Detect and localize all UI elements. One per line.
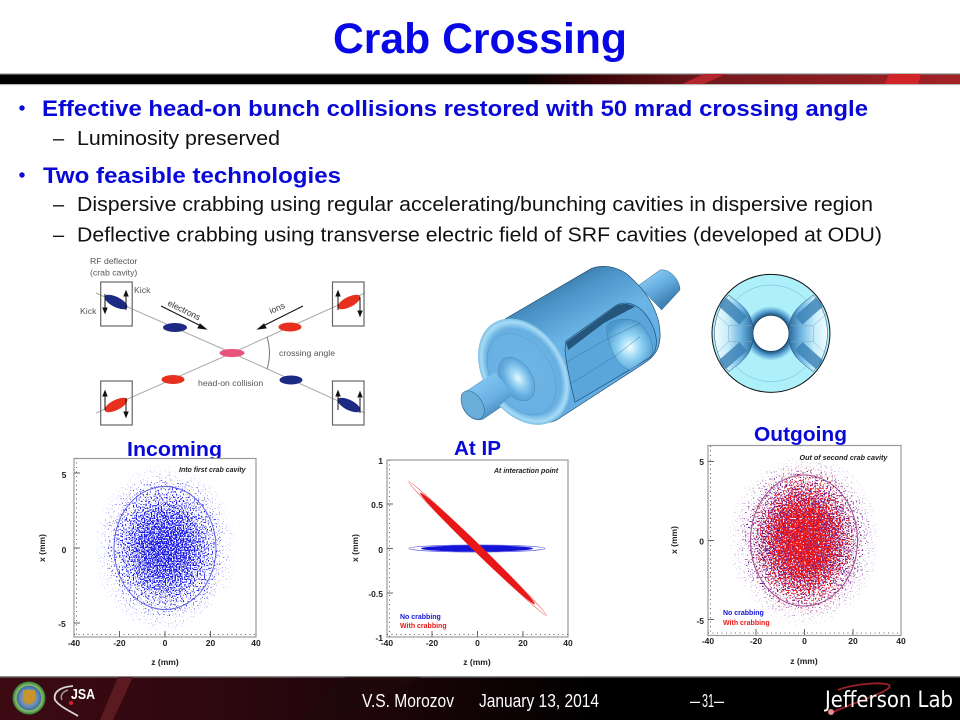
- crab cavity boxes: [101, 282, 364, 425]
- legend: No crabbing: [400, 614, 441, 621]
- legend: [400, 614, 447, 630]
- legend: With crabbing: [400, 623, 447, 630]
- plot caption: At interaction point: [493, 468, 559, 475]
- tick labels: 0: [699, 536, 704, 546]
- sub-bullet: luminosity: Luminosity preserved: [77, 128, 280, 150]
- beam ellipse: [114, 486, 216, 610]
- footer text: page number: 31: [702, 691, 714, 711]
- plot heading: Outgoing: Outgoing: [754, 423, 847, 446]
- bullet list: [19, 96, 882, 246]
- inner lobe: [607, 319, 653, 370]
- tick labels: -1: [375, 633, 383, 643]
- tick labels: 40: [251, 638, 261, 648]
- schematic labels: crossing angle: [279, 348, 335, 358]
- axis ticks: [387, 460, 568, 637]
- tick labels: 0: [378, 545, 383, 555]
- tick labels: 1: [378, 456, 383, 466]
- tick labels: 20: [848, 636, 858, 646]
- lobe mesh lines: [716, 314, 826, 354]
- crab crossing schematic: [80, 256, 365, 425]
- hub: [491, 351, 542, 407]
- inner edges: [567, 323, 640, 402]
- tick labels: 5: [699, 457, 704, 467]
- tick labels: [37, 470, 261, 667]
- right beam pipe: [638, 270, 680, 310]
- tick labels: [350, 456, 573, 667]
- front face: [459, 301, 589, 442]
- schematic labels: Kick: [134, 285, 151, 295]
- tick labels: z (mm): [790, 656, 818, 666]
- icon: DOE seal: [12, 682, 46, 714]
- no crabbing beam: [409, 545, 545, 552]
- footer text: page number: –: [690, 691, 700, 711]
- tick labels: 0: [475, 638, 480, 648]
- tick labels: x (mm): [669, 526, 679, 554]
- schematic labels: Kick: [80, 306, 97, 316]
- crossing angle arc: [267, 337, 270, 369]
- sub-bullet: deflective crabbing: Deflective crabbing using transverse electric field of SRF cavities (developed at ODU): [77, 224, 882, 246]
- schematic labels: head-on collision: [198, 378, 263, 388]
- icon: cavity end view: [712, 274, 830, 392]
- left lobe: [714, 295, 753, 372]
- axis ticks: [74, 458, 256, 637]
- kick arrows: [103, 291, 362, 417]
- disc: [712, 274, 830, 392]
- beam hole: [753, 315, 789, 351]
- cylinder body: [483, 266, 660, 423]
- scatter points: [93, 464, 237, 632]
- beam ellipse: [750, 475, 858, 606]
- plot caption: Into first crab cavity: [179, 467, 247, 474]
- plot frame: [74, 458, 256, 637]
- schematic labels: electrons: [166, 298, 203, 323]
- scatter points: [728, 454, 880, 626]
- title: Crab Crossing: [333, 15, 627, 63]
- tick labels: -40: [68, 638, 80, 648]
- direction arrows: [161, 306, 303, 329]
- scatter plot: at IP: [350, 456, 573, 667]
- icon: crab cavity 3D model: [456, 266, 680, 442]
- tick labels: -40: [702, 636, 714, 646]
- right lobe: [789, 295, 827, 372]
- sub-bullet: dispersive crabbing: Dispersive crabbing using regular accelerating/bunching cavities in dispersive region: [77, 194, 873, 216]
- pipe on the face: [461, 372, 513, 420]
- schematic labels: [80, 256, 335, 388]
- plot heading: At IP: At IP: [454, 437, 501, 460]
- plot frame: [708, 446, 901, 636]
- tick labels: z (mm): [463, 657, 491, 667]
- sub-bullet: deflective crabbing: –: [53, 224, 65, 246]
- tick labels: 40: [896, 636, 906, 646]
- tick labels: 5: [62, 470, 67, 480]
- plot caption: Out of second crab cavity: [800, 453, 888, 462]
- left beam pipe: [461, 370, 518, 420]
- tick labels: [669, 457, 906, 666]
- tick labels: -20: [750, 636, 762, 646]
- bullet: head-on collisions: Effective head-on bunch collisions restored with 50 mrad crossing angle: [42, 96, 868, 121]
- tick labels: -20: [426, 638, 438, 648]
- tick labels: x (mm): [350, 534, 360, 562]
- sub-bullet: dispersive crabbing: –: [53, 194, 65, 216]
- footer bar: [0, 676, 960, 720]
- bullet: technologies: Two feasible technologies: [43, 163, 341, 188]
- schematic labels: ions: [268, 300, 287, 316]
- legend: With crabbing: [723, 620, 770, 627]
- tick labels: 0: [802, 636, 807, 646]
- footer text: page number: –: [714, 691, 724, 711]
- tick labels: 0.5: [371, 500, 383, 510]
- legend: No crabbing: [723, 610, 764, 617]
- tick labels: 40: [563, 638, 573, 648]
- plot frame: [387, 460, 568, 637]
- tick labels: z (mm): [151, 657, 179, 667]
- schematic labels: RF deflector: [90, 256, 137, 266]
- header bar: [0, 74, 960, 85]
- tick labels: -5: [696, 616, 704, 626]
- logo: JSA: [55, 686, 95, 716]
- tick labels: -0.5: [368, 589, 383, 599]
- tick labels: -40: [381, 638, 393, 648]
- tick labels: -20: [113, 638, 126, 648]
- schematic labels: (crab cavity): [90, 268, 137, 278]
- footer text: date: January 13, 2014: [479, 691, 599, 711]
- inner rings: [723, 285, 819, 382]
- beam lines: [96, 293, 365, 413]
- bunches: [103, 292, 362, 415]
- window opening: [565, 303, 656, 402]
- logo: JSA: JSA: [71, 686, 95, 703]
- sub-bullet: luminosity: –: [53, 128, 65, 150]
- tick labels: 0: [62, 545, 67, 555]
- diagonal dark bands: [722, 302, 820, 365]
- tick labels: 20: [518, 638, 528, 648]
- legend: [723, 610, 770, 627]
- axis ticks: [708, 446, 901, 635]
- footer text: author: V.S. Morozov: [362, 691, 454, 711]
- window inner shadow: [566, 304, 635, 350]
- scatter plot: outgoing: [669, 446, 906, 666]
- tick labels: 20: [206, 638, 215, 648]
- tick labels: x (mm): [37, 534, 47, 562]
- tick labels: -5: [58, 619, 66, 629]
- scatter plot: incoming: [37, 458, 261, 667]
- tick labels: 0: [163, 638, 168, 648]
- with crabbing beam: [406, 479, 549, 618]
- plot heading: Incoming: Incoming: [127, 438, 222, 461]
- pipe end cap: [456, 387, 489, 423]
